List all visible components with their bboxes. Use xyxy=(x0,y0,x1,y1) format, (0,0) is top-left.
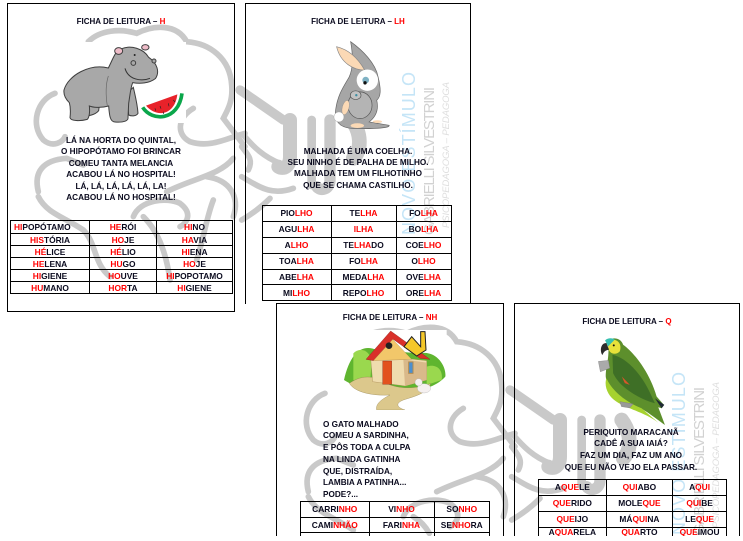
table: words with LH: COELHO xyxy=(406,240,441,250)
heading: ficha Q: FICHA DE LEITURA – Q xyxy=(582,317,672,326)
text block: verse NH: QUE, DISTRAÍDA, xyxy=(323,466,392,476)
table: words with LH: MILHO xyxy=(283,288,310,298)
icon: hippo and watermelon xyxy=(63,42,186,123)
text block: verse H: COMEU TANTA MELANCIA xyxy=(69,158,173,168)
watermark: lower right: NOVO ESTÍMULO xyxy=(669,372,689,535)
table: words with H: HERÓI xyxy=(110,222,136,232)
watermark: lower right: GABRIELLI SILVESTRINI xyxy=(691,387,708,535)
icon: parrot xyxy=(598,338,665,425)
text block: verse NH: NA LINDA GATINHA xyxy=(323,455,400,464)
table: words with LH: OVELHA xyxy=(406,272,441,282)
table: words with NH xyxy=(300,500,490,538)
table: words with H: HORTA xyxy=(108,282,138,292)
text block: verse H: LÁ NA HORTA DO QUINTAL, xyxy=(66,136,176,144)
table: words with Q: QUIBE xyxy=(686,498,713,508)
table: words with LH: FOLHA xyxy=(409,208,438,218)
table: words with NH: FARINHA xyxy=(383,520,420,530)
text block: verse H: ACABOU LÁ NO HOSPITAL! xyxy=(66,193,176,202)
panel: ficha de leitura NH xyxy=(276,303,504,536)
table: words with LH: MEDALHA xyxy=(343,272,384,282)
table: words with H: HÉLICE xyxy=(35,246,65,256)
table: words with H: HIGIENE xyxy=(33,270,67,280)
table: words with LH: AGULHA xyxy=(279,224,314,234)
heading: ficha NH: FICHA DE LEITURA – NH xyxy=(343,313,437,322)
table: words with NH: SENHORA xyxy=(441,520,483,530)
text block: verse NH: O GATO MALHADO xyxy=(323,420,399,428)
text block: verse Q: FAZ UM DIA, FAZ UM ANO xyxy=(580,451,682,460)
table: words with H: HOUVE xyxy=(108,270,138,280)
text block: verse LH: SEU NINHO É DE PALHA DE MILHO. xyxy=(287,158,428,167)
table: words with H: HUGO xyxy=(110,258,136,268)
table: words with NH: CAMINHÃO xyxy=(312,520,358,530)
table: words with LH: PIOLHO xyxy=(280,208,313,218)
table: words with LH: FOLHA xyxy=(349,256,378,266)
text block: verse H: ACABOU LÁ NO HOSPITAL! xyxy=(66,170,176,179)
panel: ficha de leitura LH xyxy=(245,3,471,304)
icon: house with cats xyxy=(344,330,447,410)
table: words with LH: ALHO xyxy=(285,240,308,250)
icon: rabbit with baby xyxy=(334,41,390,129)
text block: verse Q: QUE EU NÃO VEJO ELA PASSAR. xyxy=(565,463,697,472)
table: words with Q: QUIABO xyxy=(623,482,656,492)
table: words with LH: TOALHA xyxy=(279,256,314,266)
watermark: upper left: GABRIELLI SILVESTRINI xyxy=(421,87,438,235)
text block: verse H: LÁ, LÁ, LÁ, LÁ, LÁ, LA! xyxy=(76,182,166,190)
table: words with Q: QUEIJO xyxy=(557,514,588,524)
table: words with H: HINO xyxy=(184,222,205,232)
table: words with H: HELENA xyxy=(33,258,67,268)
table: words with H: HIPOPOTAMO xyxy=(166,270,223,280)
watermark: lower right: PSICOPEDAGOGA – PEDAGOGA xyxy=(711,382,722,528)
table: words with H: HISTÓRIA xyxy=(30,234,70,244)
text block: verse NH xyxy=(323,420,410,499)
table: words with Q: AQUI xyxy=(689,482,710,492)
table: words with LH: TELHA xyxy=(350,208,377,218)
heading: ficha LH: FICHA DE LEITURA – LH xyxy=(311,17,405,26)
table: words with Q xyxy=(538,478,727,538)
table: words with H: HIGIENE xyxy=(177,282,212,292)
text block: verse H: O HIPOPÓTAMO FOI BRINCAR xyxy=(61,147,181,156)
table: words with Q: QUERIDO xyxy=(553,498,592,508)
text block: verse H xyxy=(61,136,181,202)
table: words with NH: VINHO xyxy=(388,504,415,514)
table: words with LH: ABELHA xyxy=(279,272,314,282)
table: words with LH: OLHO xyxy=(411,256,436,266)
table: words with Q: LEQUE xyxy=(685,514,714,524)
text block: verse LH: MALHADA É UMA COELHA. xyxy=(304,146,412,156)
watermark: upper left: NOVO ESTÍMULO xyxy=(399,72,419,235)
table: words with H: HIPOPÓTAMO xyxy=(14,222,71,232)
table: words with Q: MOLEQUE xyxy=(618,498,661,508)
panel: ficha de leitura Q xyxy=(514,303,740,536)
heading: ficha H: FICHA DE LEITURA – H xyxy=(77,17,165,26)
text block: verse Q: CADÊ A SUA IAIÁ? xyxy=(594,439,668,448)
table: words with H xyxy=(10,220,233,294)
text block: verse NH: COMEU A SARDINHA, xyxy=(323,431,409,440)
table: words with H: HAVIA xyxy=(182,234,207,244)
table: words with H: HOJE xyxy=(183,258,206,268)
table: words with Q: AQUELE xyxy=(555,482,590,492)
text block: verse LH: QUE SE CHAMA CASTILHO. xyxy=(303,181,413,190)
table: words with LH: ORELHA xyxy=(406,288,441,298)
table: words with LH xyxy=(262,205,452,301)
table: words with NH: SONHO xyxy=(446,504,477,514)
watermark: upper left: PSICOPEDAGOGA – PEDAGOGA xyxy=(441,82,452,228)
table: words with H: HOJE xyxy=(112,234,134,244)
table: words with H: HÉLIO xyxy=(110,246,136,256)
table: words with H: HUMANO xyxy=(31,282,69,292)
text block: verse NH: E PÔS TODA A CULPA xyxy=(323,443,410,452)
table: words with LH: BOLHA xyxy=(409,224,438,234)
panel: ficha de leitura H xyxy=(7,3,235,312)
text block: verse NH: LAMBIA A PATINHA... xyxy=(323,478,406,487)
text block: verse NH: PODE?... xyxy=(323,490,358,499)
table: words with LH: REPOLHO xyxy=(343,288,384,298)
text block: verse LH: MALHADA TEM UM FILHOTINHO xyxy=(294,169,422,178)
table: words with LH: TELHADO xyxy=(343,240,384,250)
text block: verse Q xyxy=(565,428,697,472)
text block: verse LH xyxy=(287,146,428,190)
text block: verse Q: PERIQUITO MARACANÃ xyxy=(583,428,679,436)
table: words with LH: ILHA xyxy=(354,224,373,234)
table: words with Q: MÁQUINA xyxy=(619,514,659,524)
table: words with H: HIENA xyxy=(181,246,208,256)
table: words with NH: CARRINHO xyxy=(312,504,357,514)
